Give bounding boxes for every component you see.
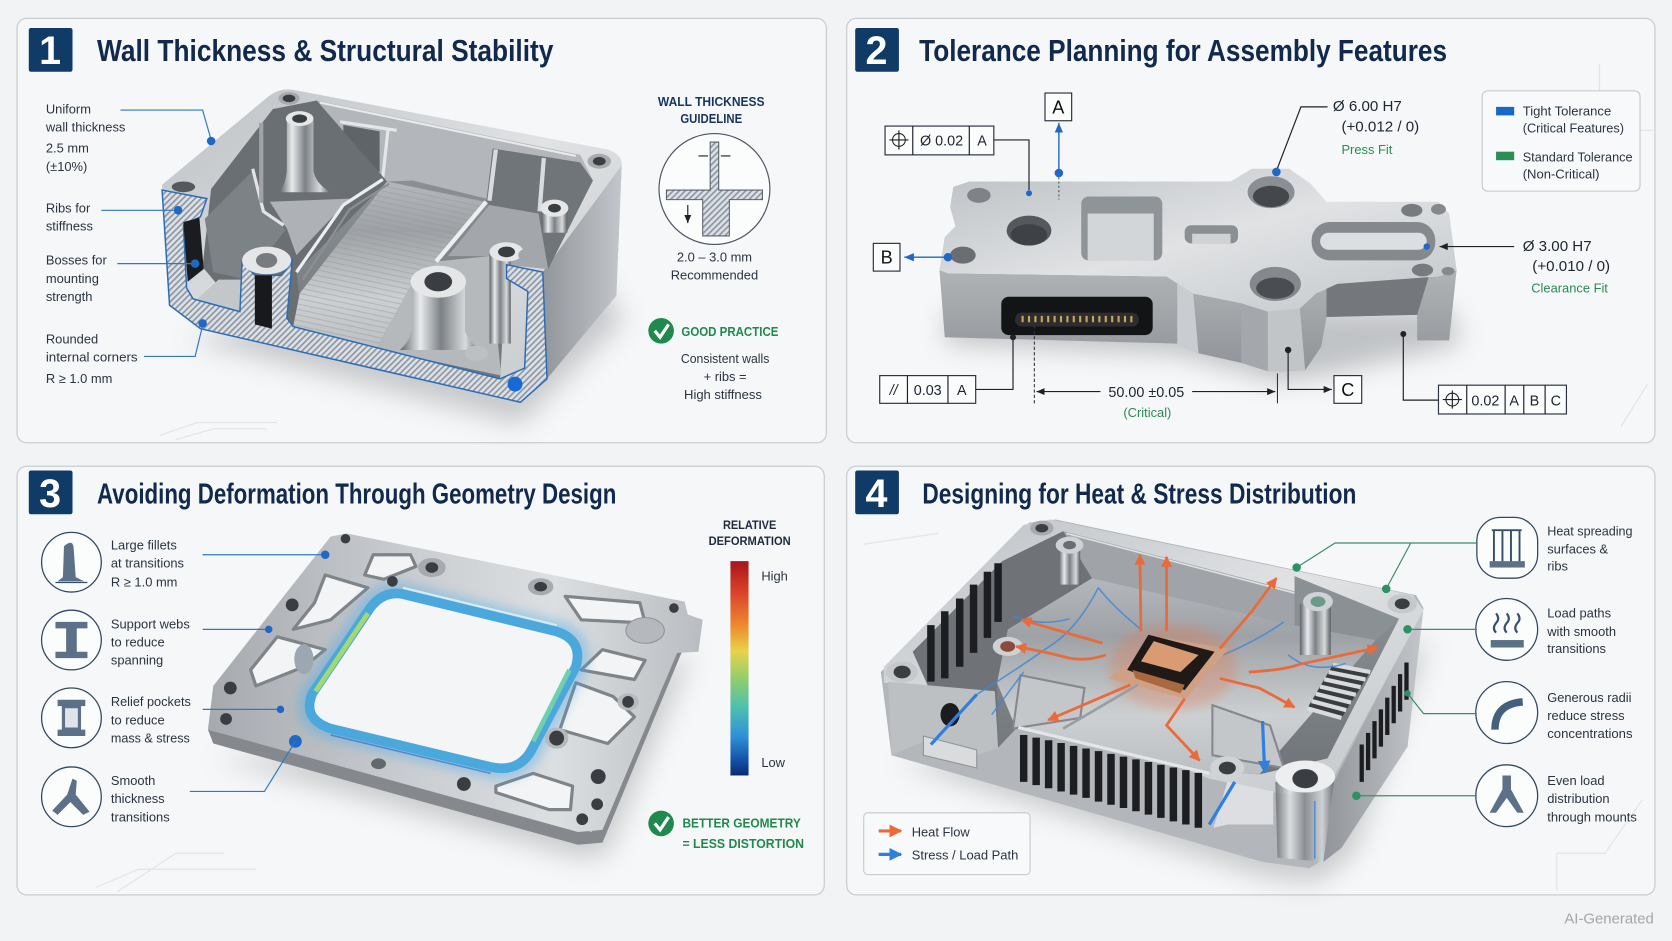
wall thickness guideline xyxy=(658,94,770,283)
good practice note: High stiffness xyxy=(684,387,762,402)
tolerance legend xyxy=(1482,91,1640,191)
feature list with icons: transitions xyxy=(111,809,170,824)
callouts: wall features: Ribs for xyxy=(46,200,91,215)
feature list with icons: Generous radii xyxy=(1547,690,1631,705)
section number 1: 1 xyxy=(39,29,61,73)
feature list with icons: transitions xyxy=(1547,641,1606,656)
feature list with icons: distribution xyxy=(1547,791,1610,806)
callouts: wall features: stiffness xyxy=(46,219,93,234)
wall thickness guideline: WALL THICKNESS xyxy=(658,94,765,109)
feature list with icons xyxy=(42,532,329,827)
datum and GD&T callouts: Clearance Fit xyxy=(1531,280,1608,295)
icon: smooth transitions xyxy=(42,767,101,827)
good practice note: Consistent walls xyxy=(681,351,769,366)
better geometry note: = LESS DISTORTION xyxy=(682,836,804,851)
frame plate with deformation map xyxy=(208,533,703,859)
feature list with icons: mass & stress xyxy=(111,730,190,745)
callouts: wall features: internal corners xyxy=(46,350,138,365)
datum and GD&T callouts: // xyxy=(889,383,900,399)
panel: wall thickness xyxy=(17,18,826,443)
datum and GD&T callouts: A xyxy=(977,133,987,149)
heading 3: Avoiding Deformation Through Geometry Design xyxy=(97,478,616,510)
wall thickness guideline: 2.0 – 3.0 mm xyxy=(677,250,752,265)
datum and GD&T callouts: Ø 3.00 H7 xyxy=(1523,238,1592,255)
better geometry note: BETTER GEOMETRY xyxy=(682,816,801,831)
heat-spreading enclosure xyxy=(881,520,1429,883)
feature list with icons: through mounts xyxy=(1547,809,1637,824)
feature list with icons: to reduce xyxy=(111,634,165,649)
callouts: wall features: strength xyxy=(46,289,92,304)
feature list with icons: Smooth xyxy=(111,773,155,788)
icon: relief pockets xyxy=(42,688,101,748)
feature list with icons: ribs xyxy=(1547,559,1568,574)
feature list with icons: concentrations xyxy=(1547,726,1633,741)
feature list with icons: thickness xyxy=(111,791,165,806)
feature list with icons: R ≥ 1.0 mm xyxy=(111,575,177,590)
feature list with icons: reduce stress xyxy=(1547,708,1625,723)
datum and GD&T callouts: Press Fit xyxy=(1341,142,1393,157)
callouts: wall features: R ≥ 1.0 mm xyxy=(46,371,112,386)
section number 1 xyxy=(29,28,73,73)
datum and GD&T callouts: 0.03 xyxy=(914,383,942,399)
section number 2 xyxy=(855,28,899,73)
section number 2: 2 xyxy=(866,29,887,73)
tolerance legend: (Critical Features) xyxy=(1523,120,1624,135)
deformation color scale: DEFORMATION xyxy=(709,534,791,548)
panel: heat and stress xyxy=(847,466,1655,895)
datum and GD&T callouts: Ø 6.00 H7 xyxy=(1333,98,1402,115)
machined plate xyxy=(939,169,1461,382)
section number 4: 4 xyxy=(866,472,888,516)
feature list with icons: spanning xyxy=(111,653,163,668)
good practice note: + ribs = xyxy=(704,369,747,384)
datum and GD&T callouts: Ø 0.02 xyxy=(920,133,963,149)
tolerance legend: (Non-Critical) xyxy=(1523,166,1599,181)
callouts: wall features xyxy=(45,101,215,386)
datum and GD&T callouts xyxy=(873,93,1610,420)
feature list with icons xyxy=(1292,517,1637,827)
feature list with icons: with smooth xyxy=(1546,624,1616,639)
heat and stress legend: Heat Flow xyxy=(912,824,970,839)
datum and GD&T callouts: (+0.012 / 0) xyxy=(1341,118,1419,135)
heat and stress legend xyxy=(864,813,1030,875)
wall thickness guideline: GUIDELINE xyxy=(680,111,742,126)
feature list with icons: Even load xyxy=(1547,773,1605,788)
deformation color scale: RELATIVE xyxy=(723,518,776,532)
datum and GD&T callouts: A xyxy=(1052,97,1065,117)
deformation color scale xyxy=(709,518,791,775)
icon: heat spreading ribs xyxy=(1477,517,1538,578)
callouts: wall features: Rounded xyxy=(46,332,98,347)
datum and GD&T callouts: 0.02 xyxy=(1471,393,1499,409)
cutaway enclosure xyxy=(162,89,624,425)
deformation color scale: Low xyxy=(761,755,786,770)
datum and GD&T callouts: A xyxy=(957,383,967,399)
heading 4: Designing for Heat & Stress Distribution xyxy=(922,478,1356,510)
callouts: wall features: wall thickness xyxy=(45,119,125,134)
callouts: wall features: mounting xyxy=(46,271,99,286)
feature list with icons: Load paths xyxy=(1547,606,1611,621)
AI-generated mark: AI-Generated xyxy=(1564,911,1654,928)
section number 3 xyxy=(29,470,73,516)
datum and GD&T callouts: C xyxy=(1551,393,1561,409)
tolerance legend: Standard Tolerance xyxy=(1523,149,1633,164)
section number 4 xyxy=(855,470,899,516)
good practice note xyxy=(648,318,779,402)
feature list with icons: Relief pockets xyxy=(111,694,191,709)
datum and GD&T callouts: A xyxy=(1509,393,1519,409)
datum and GD&T callouts: B xyxy=(881,248,893,268)
good practice note: GOOD PRACTICE xyxy=(681,324,779,339)
datum and GD&T callouts: B xyxy=(1530,393,1539,409)
better geometry note xyxy=(648,811,804,851)
panel: avoiding deformation xyxy=(17,466,824,895)
callouts: wall features: Uniform xyxy=(46,101,91,116)
icon: generous radii xyxy=(1476,682,1538,743)
icon: support webs xyxy=(42,610,101,670)
callouts: wall features: 2.5 mm xyxy=(46,141,89,156)
feature list with icons: Large fillets xyxy=(111,537,177,552)
heading 2: Tolerance Planning for Assembly Features xyxy=(919,33,1447,68)
datum and GD&T callouts: (+0.010 / 0) xyxy=(1532,258,1610,275)
callouts: wall features: Bosses for xyxy=(46,253,107,268)
feature list with icons: at transitions xyxy=(111,556,184,571)
heading 1: Wall Thickness & Structural Stability xyxy=(97,33,554,68)
datum and GD&T callouts: C xyxy=(1341,380,1354,400)
feature list with icons: Support webs xyxy=(111,616,190,631)
feature list with icons: to reduce xyxy=(111,712,165,727)
feature list with icons: Heat spreading xyxy=(1547,524,1633,539)
datum and GD&T callouts: (Critical) xyxy=(1123,405,1171,420)
wall thickness guideline: Recommended xyxy=(671,268,758,283)
icon: mounts xyxy=(1476,765,1538,827)
feature list with icons: surfaces & xyxy=(1547,542,1609,557)
datum and GD&T callouts: 50.00 ±0.05 xyxy=(1108,385,1184,401)
icon: load paths xyxy=(1476,598,1538,660)
callouts: wall features: (±10%) xyxy=(46,159,87,174)
panel: tolerance planning xyxy=(847,18,1655,443)
heat and stress legend: Stress / Load Path xyxy=(912,848,1018,863)
deformation color scale: High xyxy=(761,568,788,583)
icon: large fillets xyxy=(42,532,101,592)
tolerance legend: Tight Tolerance xyxy=(1523,103,1611,118)
section number 3: 3 xyxy=(39,472,61,516)
